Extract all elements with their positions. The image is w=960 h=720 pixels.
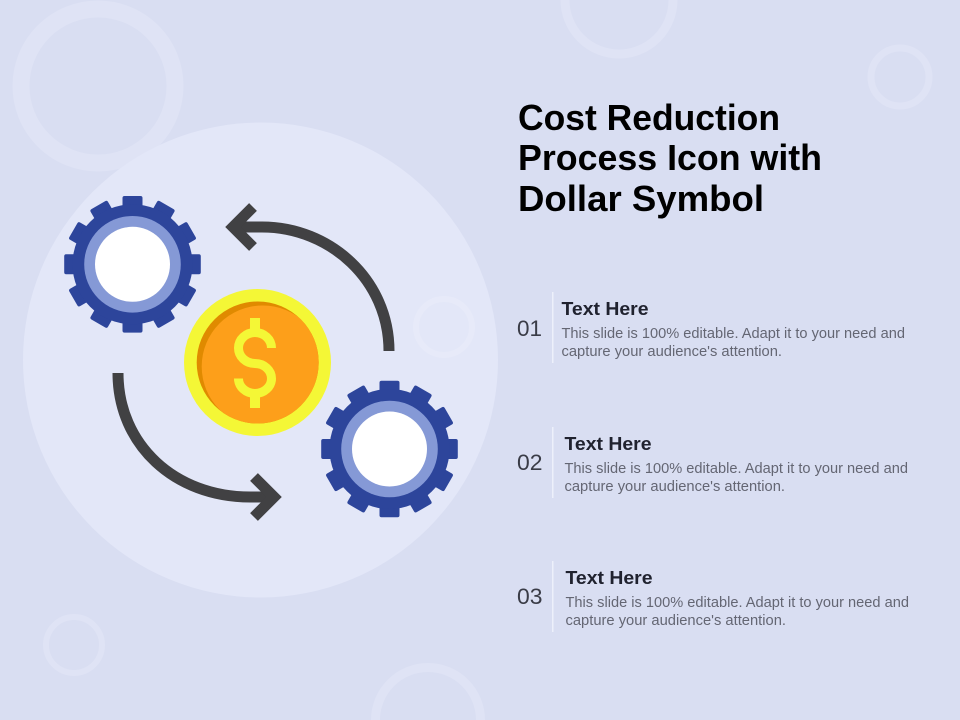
description 01 [562,326,905,360]
description 01: capture your audience's attention. [562,344,782,360]
icon: dollar coin [184,289,331,436]
icon: gear bottom right [321,381,458,517]
number 02: 02 [517,450,542,475]
large background circle [23,122,498,598]
list item 01 [517,292,905,363]
list item 03 [517,561,909,632]
title: Process Icon with [518,137,822,178]
title: Dollar Symbol [518,178,764,219]
description 01: This slide is 100% editable. Adapt it to your need and [562,326,905,342]
description 03 [566,595,909,629]
decorative ring: top centre [565,0,673,54]
description 03: capture your audience's attention. [566,613,786,629]
description 02: capture your audience's attention. [564,479,785,495]
decorative ring: centre [416,299,472,355]
number 03: 03 [517,584,542,609]
icon: gear top left [64,196,201,333]
number 01: 01 [517,316,542,341]
heading 03: Text Here [566,568,652,588]
description 03: This slide is 100% editable. Adapt it to your need and [566,595,909,611]
arrow: top curved pointing left [233,207,389,351]
arrow: bottom curved pointing right [118,373,274,517]
title: Cost Reduction [518,97,780,138]
decorative ring: bottom centre [376,668,480,720]
decorative ring: top right [871,48,929,106]
description 02 [564,461,908,495]
list item 02 [517,427,908,498]
title [518,97,822,219]
heading 02: Text Here [564,434,652,454]
decorative ring: top left [21,9,175,163]
description 02: This slide is 100% editable. Adapt it to your need and [564,461,908,477]
heading 01: Text Here [562,299,648,319]
decorative ring: bottom left [46,617,102,673]
